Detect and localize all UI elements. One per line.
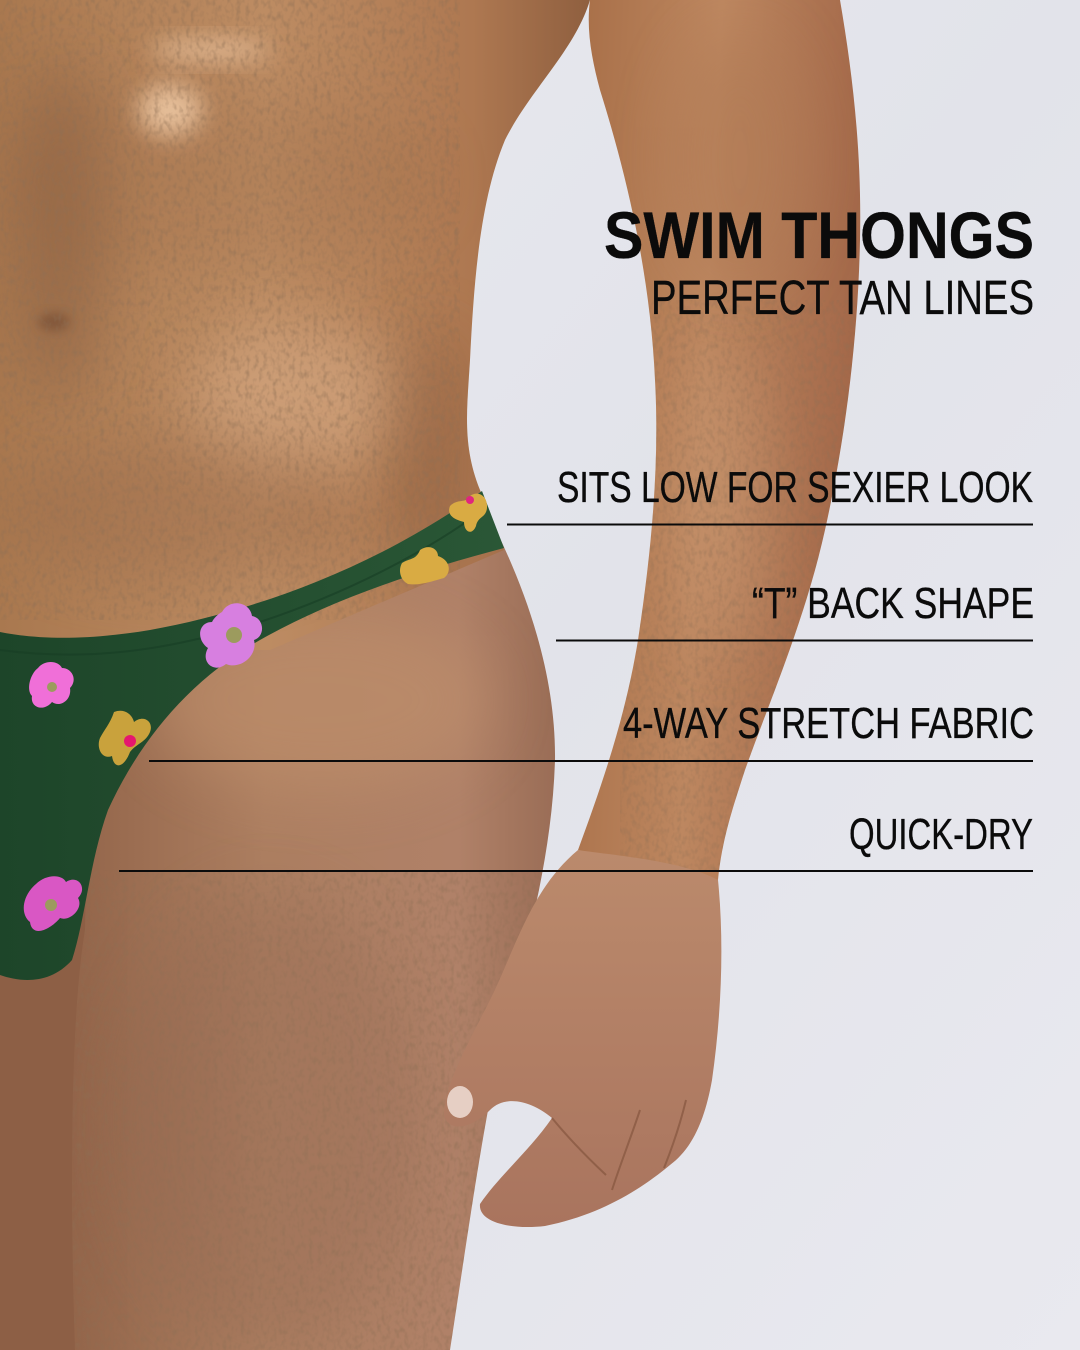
flower: yellow second [400,547,449,584]
hand [444,850,721,1227]
figure: torso [0,0,590,650]
title: SWIM THONGS [604,198,1034,272]
flower: yellow top [449,494,487,532]
figure: arm and hand [444,0,860,1227]
fingernail [447,1086,473,1118]
flower: magenta low [24,876,82,931]
figure: leg [0,530,555,1350]
flower: lilac large [200,603,262,668]
flower: yellow lower [99,711,151,765]
finger lines [552,1100,686,1190]
title [604,198,1034,325]
flower: pink small [29,662,74,708]
figure: swimwear [0,491,504,980]
